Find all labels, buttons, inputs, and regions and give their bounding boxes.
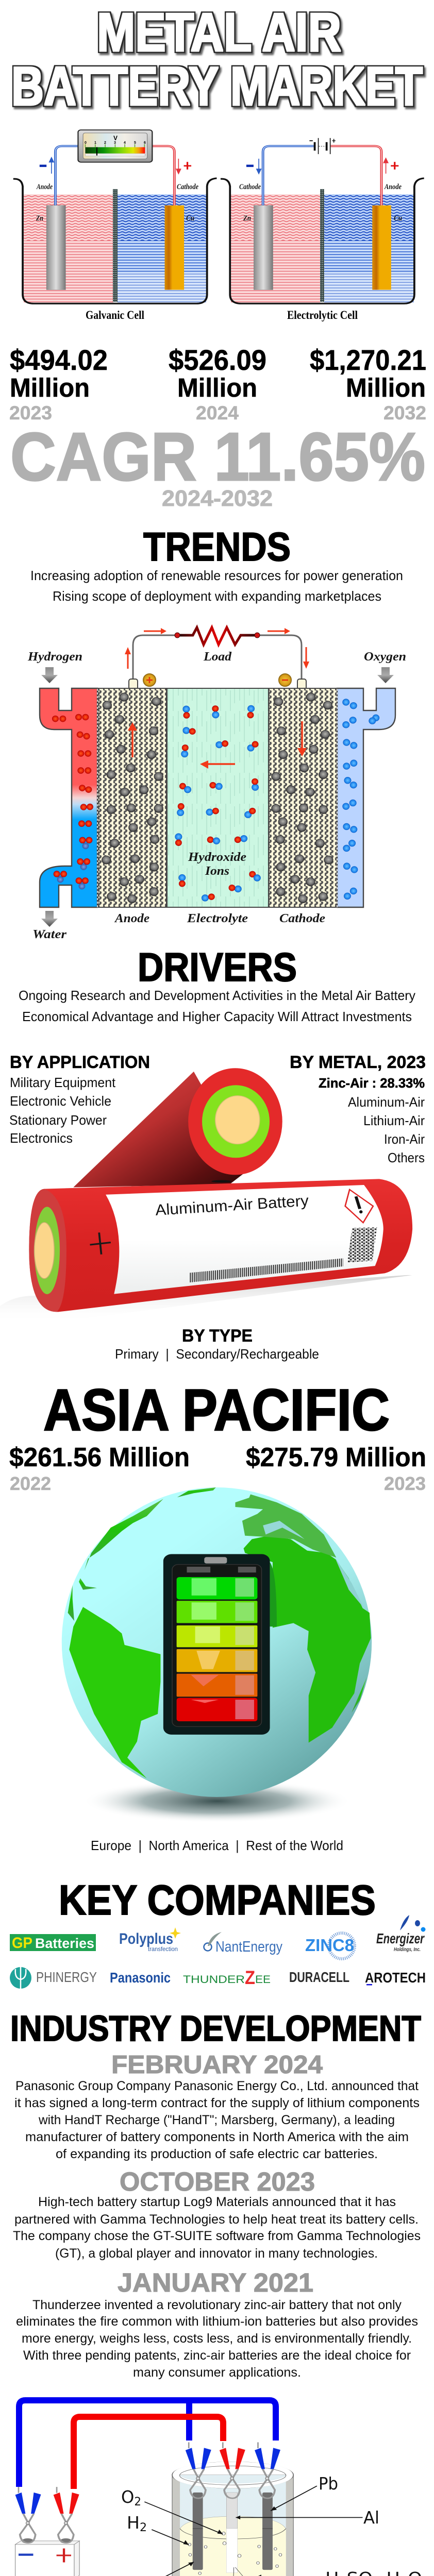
heading: key companies: KEY COMPANIES — [59, 1877, 376, 1924]
cell labels — [36, 183, 402, 321]
cell labels: Electrolytic Cell — [287, 309, 358, 321]
inner flow arrows — [128, 721, 307, 769]
regional values — [9, 1443, 426, 1494]
vessel — [172, 2462, 293, 2576]
regional values: $275.79 Million — [246, 1443, 426, 1472]
fuel cell labels: Oxygen — [364, 650, 406, 664]
gas arrows — [41, 667, 394, 927]
drivers text: Economical Advantage and Higher Capacity Will Attract Investments — [22, 1009, 412, 1024]
electrochemistry labels: 2 — [134, 2496, 141, 2509]
market size stats: Million — [177, 373, 257, 402]
bubbles — [188, 2532, 282, 2574]
regional values: 2023 — [384, 1473, 426, 1494]
external circuit — [125, 628, 309, 679]
development: January 2021 — [16, 2268, 418, 2380]
cell labels: Cu — [186, 214, 194, 223]
electrolyte layer — [167, 688, 269, 907]
electrochemistry labels: 2 — [140, 2521, 147, 2534]
development: October 2023 — [13, 2167, 421, 2261]
cell labels: Anode — [36, 183, 53, 191]
development: February 2024: manufacturer of battery components in North America with the aim — [25, 2130, 409, 2144]
battery icon — [163, 1554, 277, 1735]
development: October 2023: The company chose the GT-SUITE software from Gamma Technologies — [13, 2229, 421, 2243]
fuel cell labels: Load — [203, 650, 232, 664]
development: October 2023: OCTOBER 2023 — [120, 2167, 315, 2196]
logo: Thunderzee: Z — [245, 1967, 255, 1988]
regional values: $261.56 Million — [9, 1443, 190, 1472]
heading: drivers: DRIVERS — [138, 944, 297, 990]
meter — [78, 130, 152, 162]
particles — [52, 693, 379, 903]
CAGR: 2024-2032 — [162, 486, 273, 511]
regional values: 2022 — [10, 1473, 51, 1494]
logo: Energizer — [376, 1915, 426, 1953]
globe — [62, 1487, 372, 1797]
meter labels — [85, 134, 146, 145]
terminals — [143, 674, 292, 686]
segment: by metal: Aluminum-Air — [348, 1094, 425, 1110]
fuel cell labels: Hydrogen — [27, 650, 82, 664]
development: February 2024: FEBRUARY 2024 — [111, 2051, 323, 2079]
development: October 2023: (GT), a global player and innovator in many technologies. — [55, 2246, 378, 2261]
battery box — [15, 2538, 79, 2576]
drivers text: Ongoing Research and Development Activities in the Metal Air Battery — [19, 988, 415, 1003]
channel: oxygen — [337, 688, 395, 907]
segment: by application — [9, 1053, 150, 1146]
development: February 2024: Panasonic Group Company Panasonic Energy Co., Ltd. announced that — [15, 2079, 419, 2093]
electrochemistry labels: Pb — [319, 2473, 338, 2494]
electrochemistry labels: H — [127, 2513, 140, 2533]
segment: by application: Electronic Vehicle — [10, 1093, 111, 1109]
illustration: globe with battery — [62, 1487, 372, 1823]
fuel cell labels: Cathode — [279, 912, 325, 925]
fuel cell labels: Anode — [114, 912, 149, 925]
meter labels: V — [113, 134, 118, 142]
other regions: Europe | North America | Rest of the World — [91, 1838, 343, 1853]
market size stats: 2024 — [196, 402, 239, 423]
upper cell — [73, 1068, 282, 1187]
segment: by metal: Others — [388, 1150, 425, 1165]
meter labels: 1 — [94, 141, 96, 145]
logo: Polyplus: Polyplus — [119, 1930, 173, 1947]
battery shadow — [0, 1275, 412, 1323]
trends text — [30, 568, 403, 604]
logo: Phinergy — [10, 1967, 97, 1989]
development: February 2024: it has signed a long-term contract for the supply of lithium components — [14, 2096, 420, 2110]
development: February 2024: of expanding its production of safe electric car batteries. — [56, 2147, 378, 2161]
cell labels: Cathode — [177, 183, 198, 191]
wires — [19, 2400, 276, 2489]
segment: by type: BY TYPE — [182, 1326, 253, 1346]
cell labels: Cu — [394, 214, 402, 223]
logo: Phinergy: PHINERGY — [36, 1969, 97, 1985]
logo: GP Batteries: GP — [12, 1935, 32, 1952]
globe shadow — [83, 1780, 351, 1823]
meter labels: 2 — [104, 141, 106, 145]
development: January 2021: Thunderzee invented a revolutionary zinc-air battery that not only — [32, 2298, 402, 2312]
market size stats: 2032 — [383, 402, 426, 423]
liquid: electrolytic — [231, 189, 414, 302]
meter labels: 3 — [114, 141, 116, 145]
market size stats: $526.09 — [169, 344, 266, 376]
cell labels: Anode — [384, 183, 402, 191]
segment: by application: Stationary Power — [9, 1112, 107, 1128]
title — [11, 2, 423, 117]
pointer arrows — [144, 2486, 362, 2576]
company logos — [10, 1915, 426, 1989]
logo: Polyplus: transfection — [148, 1945, 178, 1953]
segment: by type — [115, 1326, 319, 1362]
drivers text — [19, 988, 415, 1024]
heading: trends: TRENDS — [143, 524, 291, 569]
development: January 2021: many consumer applications. — [133, 2365, 301, 2380]
cell labels: Zn — [36, 214, 43, 223]
continents — [68, 1487, 371, 1778]
fuel cell labels: Water — [32, 928, 67, 941]
logo: ZINC8: ZINC8 — [305, 1936, 354, 1955]
electrochemistry labels: Al — [363, 2507, 379, 2528]
lower cell — [29, 1179, 412, 1312]
fuel cell labels: Ions — [205, 865, 229, 878]
segment: by type: Primary | Secondary/Rechargeable — [115, 1346, 319, 1362]
logo: Thunderzee — [183, 1967, 271, 1988]
logo: GP Batteries — [10, 1934, 96, 1952]
vessel and battery — [15, 2442, 362, 2576]
trends text: Rising scope of deployment with expanding marketplaces — [53, 588, 381, 604]
battery label: Aluminum-Air Battery — [155, 1192, 309, 1219]
meter labels: 5 — [134, 141, 136, 145]
cell labels: Zn — [243, 214, 251, 223]
development: January 2021: With three pending patents, zinc-air batteries are the ideal choice for — [23, 2348, 411, 2363]
development: October 2023: High-tech battery startup Log9 Materials announced that it has — [38, 2195, 396, 2209]
meter labels: 4 — [124, 141, 126, 145]
cell wiring and vessels — [13, 138, 424, 303]
liquid: galvanic — [24, 189, 206, 302]
fuel cell labels — [27, 650, 406, 941]
illustration: aluminum-air battery — [0, 1068, 412, 1323]
development: February 2024: with HandT Recharge ("HandT"; Marsberg, Germany), a leading — [38, 2113, 395, 2127]
logo: Thunderzee: EE — [255, 1974, 271, 1986]
segment: by metal — [290, 1053, 426, 1165]
heading: asia pacific: ASIA PACIFIC — [43, 1378, 390, 1443]
market size stats: Million — [10, 373, 90, 402]
development: January 2021: more energy, weighs less, costs less, and is environmentally friendly. — [22, 2331, 412, 2346]
cathode layer — [269, 679, 337, 907]
logo: Panasonic: Panasonic — [110, 1970, 171, 1986]
electrochemistry labels: O — [121, 2487, 135, 2507]
logo: NantEnergy — [204, 1932, 282, 1955]
electrodes — [193, 2493, 273, 2573]
title: METAL AIR — [97, 2, 341, 63]
fuel cell labels: Hydroxide — [188, 851, 246, 864]
development: January 2021: JANUARY 2021 — [118, 2268, 313, 2297]
segment: by application: BY APPLICATION — [10, 1053, 150, 1072]
logo: Energizer: Holdings, Inc. — [394, 1947, 421, 1953]
segment: by metal: Iron-Air — [384, 1131, 425, 1147]
logo: GP Batteries: Batteries — [35, 1936, 94, 1951]
illustration: galvanic and electrolytic cells — [13, 130, 424, 321]
market size stats: Million — [346, 373, 426, 402]
logo: Polyplus — [119, 1927, 181, 1953]
development: October 2023: partnered with Gamma Technologies to help heat treat its battery cells. — [14, 2212, 419, 2227]
trends text: Increasing adoption of renewable resources for power generation — [30, 568, 403, 583]
segment: by application: Military Equipment — [10, 1075, 116, 1090]
market size stats — [9, 344, 426, 423]
logo: Thunderzee: THUNDER — [183, 1974, 245, 1986]
channel: hydrogen — [40, 688, 97, 907]
meter labels: 0 — [85, 141, 87, 145]
segment: by application: Electronics — [10, 1130, 73, 1146]
meter labels: 6 — [144, 141, 146, 145]
segment: by metal: BY METAL, 2023 — [290, 1053, 426, 1072]
market size stats: $494.02 — [10, 344, 108, 376]
segment: by metal: Lithium-Air — [363, 1113, 425, 1128]
electrochemistry labels — [121, 2473, 422, 2576]
logo: NantEnergy: NantEnergy — [215, 1939, 282, 1955]
segment: by metal: Zinc-Air : 28.33% — [319, 1075, 425, 1091]
illustration: anodizing cell — [15, 2400, 422, 2576]
magnifier — [230, 2567, 298, 2576]
market size stats: 2023 — [9, 402, 52, 423]
development: January 2021: eliminates the fire common with lithium-ion batteries but also provides — [16, 2314, 418, 2329]
development: February 2024 — [14, 2051, 420, 2161]
fuel cell labels: Electrolyte — [187, 912, 248, 925]
cell labels: Cathode — [239, 183, 261, 191]
cell labels: Galvanic Cell — [86, 309, 144, 321]
anode layer — [98, 679, 166, 907]
logo: Duracell: DURACELL — [289, 1969, 349, 1985]
illustration: fuel cell — [27, 628, 406, 941]
